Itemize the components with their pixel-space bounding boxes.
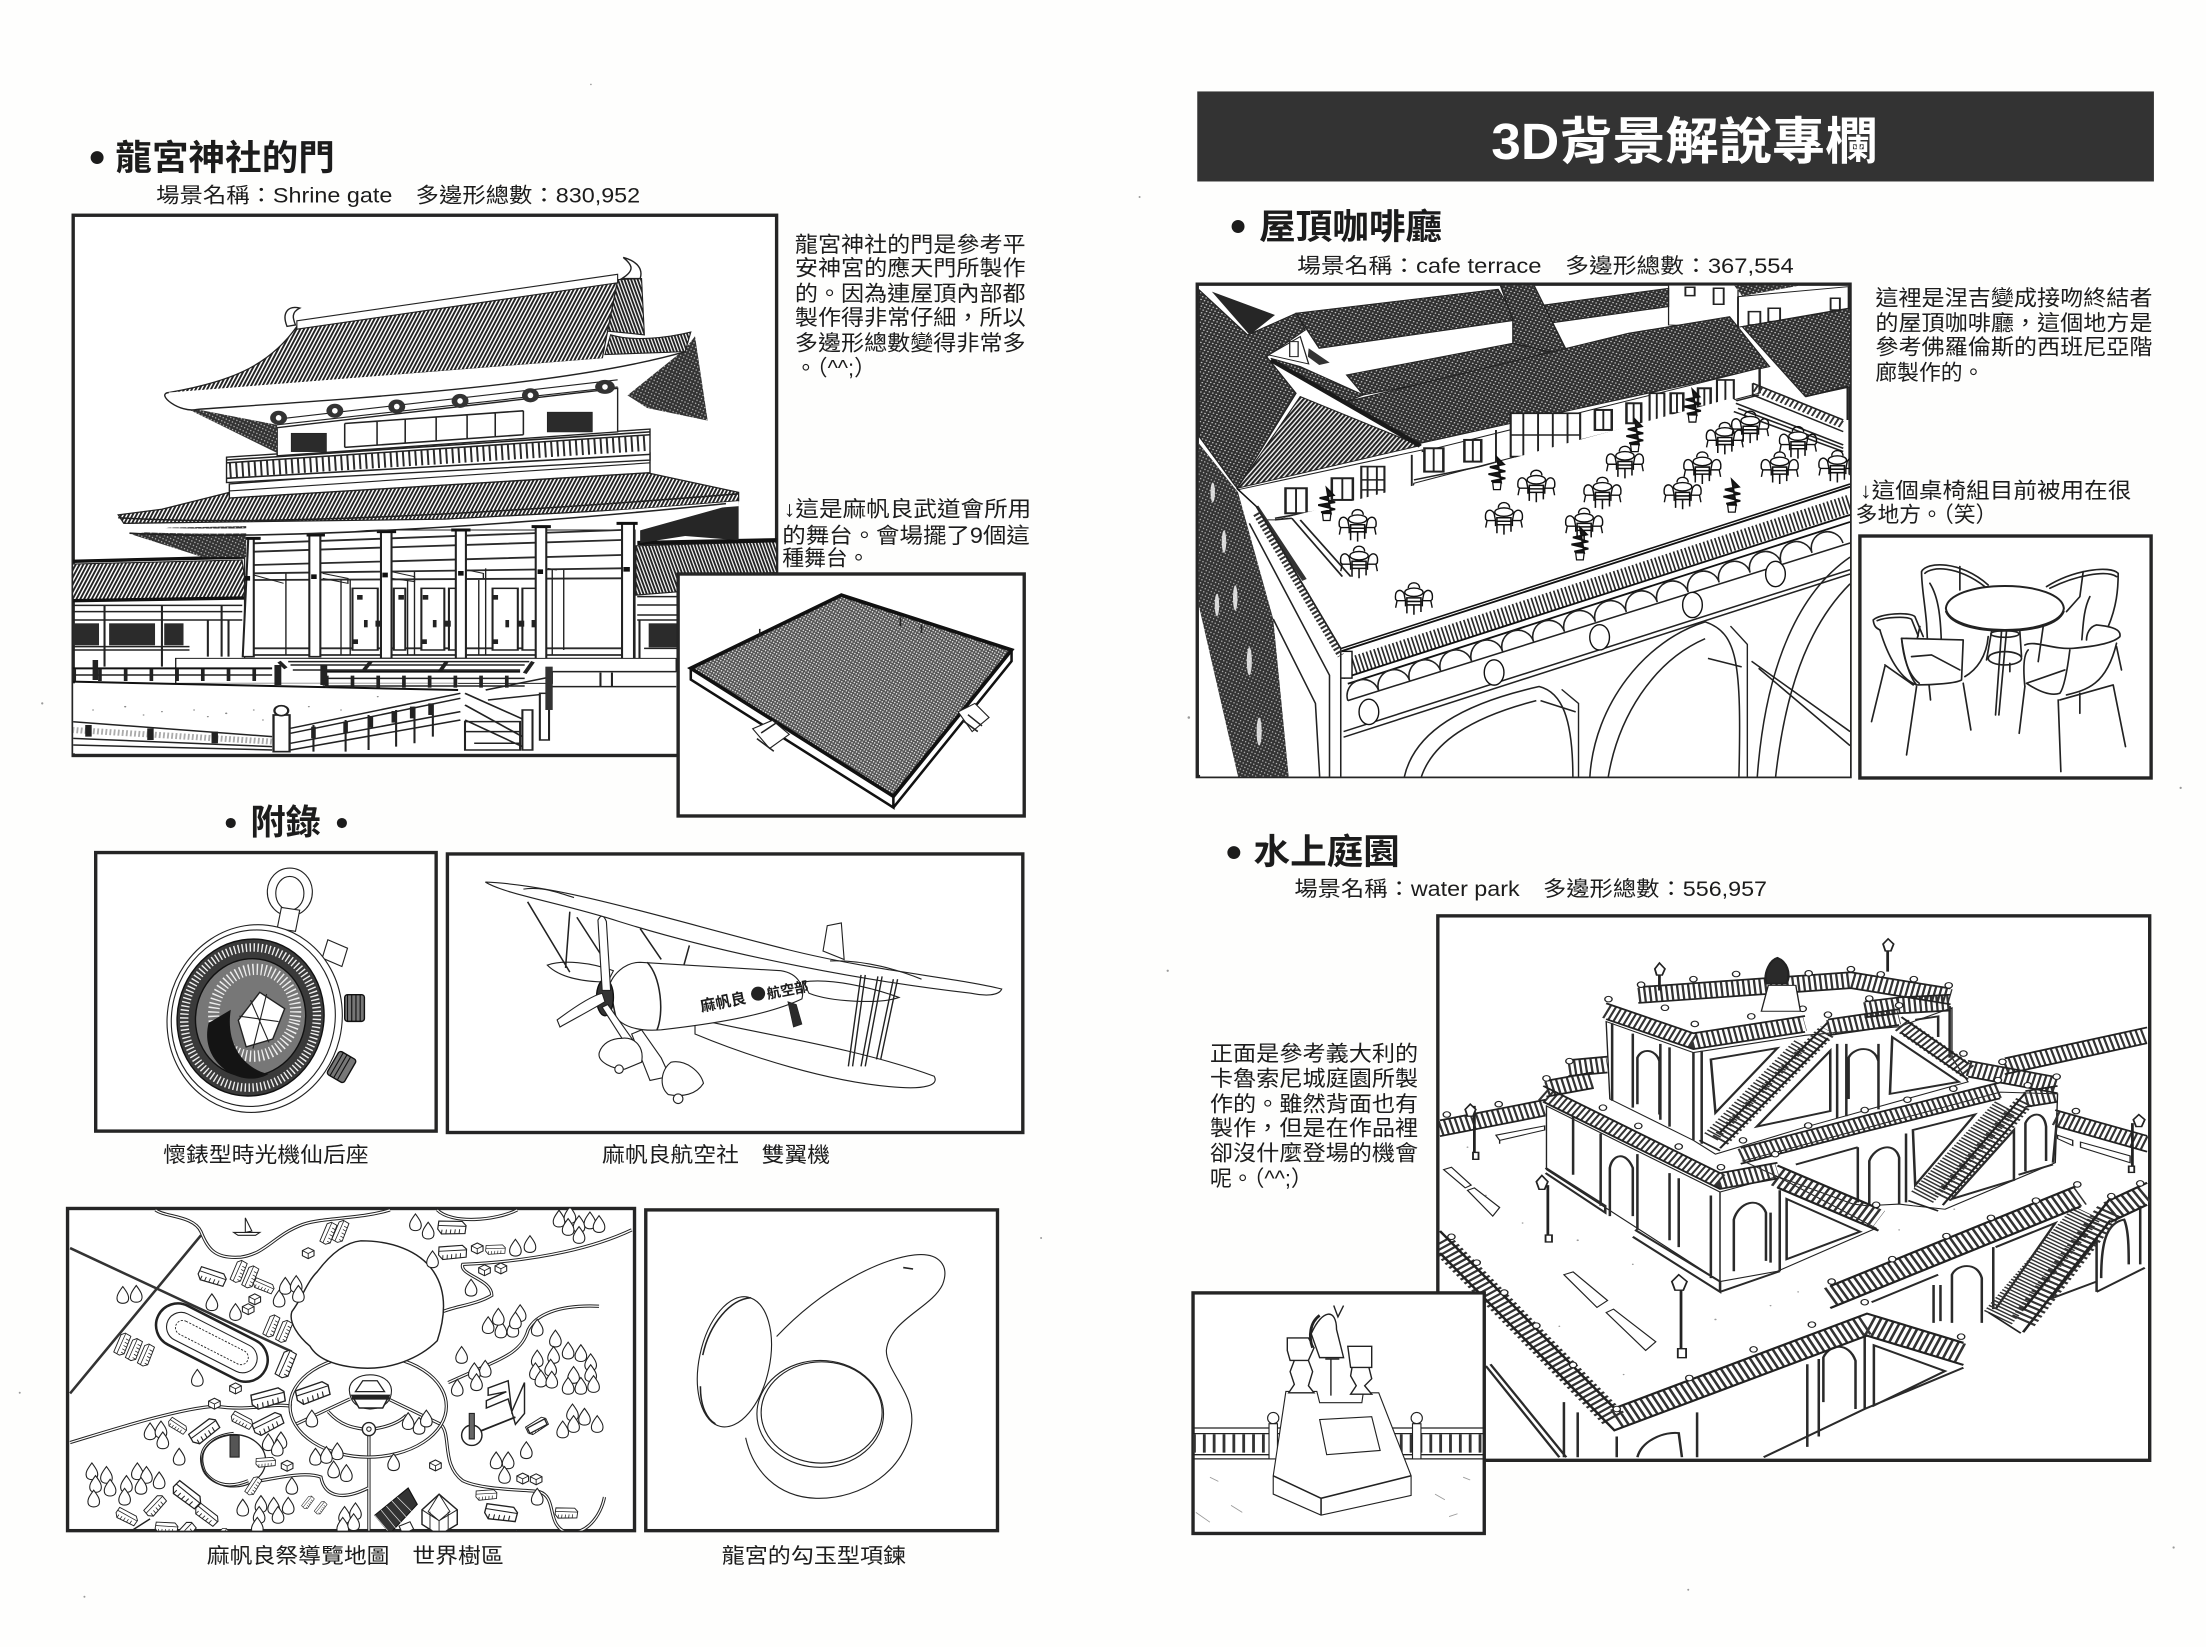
illustration: biplane (447, 854, 1023, 1133)
panel: shrine gate section (70, 139, 1031, 816)
description: rooftop cafe: 這裡是涅吉變成接吻終結者 (1875, 285, 2153, 310)
heading: rooftop cafe: 屋頂咖啡廳 (1259, 208, 1442, 247)
lower terrace walls (1486, 1206, 2145, 1457)
note: martial arts stage: ↓這是麻帆良武道會所用 (784, 496, 1031, 521)
note: martial arts stage (782, 496, 1031, 571)
illustration: cafe terrace (1197, 284, 1856, 778)
title banner (1197, 91, 2154, 181)
description: shrine gate: 的。因為連屋頂內部都 (795, 281, 1026, 306)
top tier walls (1606, 1008, 1968, 1154)
scene name and polygon count: 場景名稱：Shrine gate 多邊形總數：830,952 (156, 184, 640, 208)
description: shrine gate: 龍宮神社的門是參考平 (795, 232, 1026, 257)
description: water garden: 卡魯索尼城庭園所製 (1210, 1066, 1418, 1091)
caption: festival map: 麻帆良祭導覽地圖 世界樹區 (207, 1544, 504, 1568)
description: shrine gate: 多邊形總數變得非常多 (795, 330, 1026, 355)
heading: water garden: 水上庭園 (1254, 833, 1400, 872)
fuselage lettering (699, 976, 810, 1016)
description: rooftop cafe: 的屋頂咖啡廳，這個地方是 (1875, 311, 2153, 336)
middle tier walls (1546, 1106, 1720, 1282)
description: water garden: 作的。雖然背面也有 (1210, 1091, 1418, 1116)
illustration: magatama necklace (646, 1210, 997, 1531)
illustration: shrine gate (70, 215, 777, 755)
description: water garden: 卻沒什麼登場的機會 (1210, 1141, 1418, 1166)
description: shrine gate: 安神宮的應天門所製作 (795, 256, 1026, 281)
fuselage lettering: 麻帆良 (699, 988, 748, 1016)
description: rooftop cafe (1875, 285, 2153, 385)
scene name and polygon count: 場景名稱：cafe terrace 多邊形總數：367,554 (1297, 254, 1794, 278)
illustration: pocket watch time machine (96, 853, 436, 1131)
illustration: table and chairs (1860, 536, 2151, 778)
note: martial arts stage: 的舞台。會場擺了9個這 (782, 523, 1030, 548)
heading: appendix (226, 803, 347, 842)
description: rooftop cafe: 廊製作的。 (1875, 360, 1984, 385)
heading: shrine gate: 龍宮神社的門 (115, 139, 335, 178)
note: table and chairs: ↓這個桌椅組目前被用在很 (1860, 478, 2131, 503)
description: water garden: 正面是參考義大利的 (1210, 1041, 1418, 1066)
description: rooftop cafe: 參考佛羅倫斯的西班尼亞階 (1875, 335, 2153, 360)
heading: appendix: 附錄 (250, 803, 321, 842)
description: water garden (1210, 1041, 1418, 1191)
illustration: statue on pedestal (1193, 1293, 1484, 1533)
title banner: 3D背景解說專欄 (1491, 113, 1878, 170)
description: shrine gate: 。（^^;） (795, 356, 876, 381)
note: table and chairs: 多地方。（笑） (1856, 502, 1997, 527)
description: shrine gate: 製作得非常仔細，所以 (795, 305, 1026, 330)
description: water garden: 呢。（^^;） (1210, 1166, 1313, 1191)
caption: biplane: 麻帆良航空社 雙翼機 (602, 1143, 830, 1167)
illustration: festival map (68, 1207, 635, 1563)
scene name and polygon count: 場景名稱：water park 多邊形總數：556,957 (1294, 877, 1767, 901)
illustration: water park (1438, 916, 2150, 1460)
note: martial arts stage: 種舞台。 (782, 546, 869, 571)
caption: necklace: 龍宮的勾玉型項鍊 (722, 1544, 906, 1568)
fuselage lettering: 航空部 (765, 978, 810, 1002)
note: table and chairs (1856, 478, 2131, 527)
illustration: stage (678, 574, 1024, 816)
caption: pocket watch: 懷錶型時光機仙后座 (163, 1143, 369, 1167)
panel: water garden section (1193, 833, 2150, 1533)
description: water garden: 製作，但是在作品裡 (1210, 1115, 1418, 1140)
description: shrine gate (795, 232, 1026, 381)
panel: rooftop cafe section (1197, 208, 2153, 778)
panel: appendix (68, 803, 1023, 1568)
